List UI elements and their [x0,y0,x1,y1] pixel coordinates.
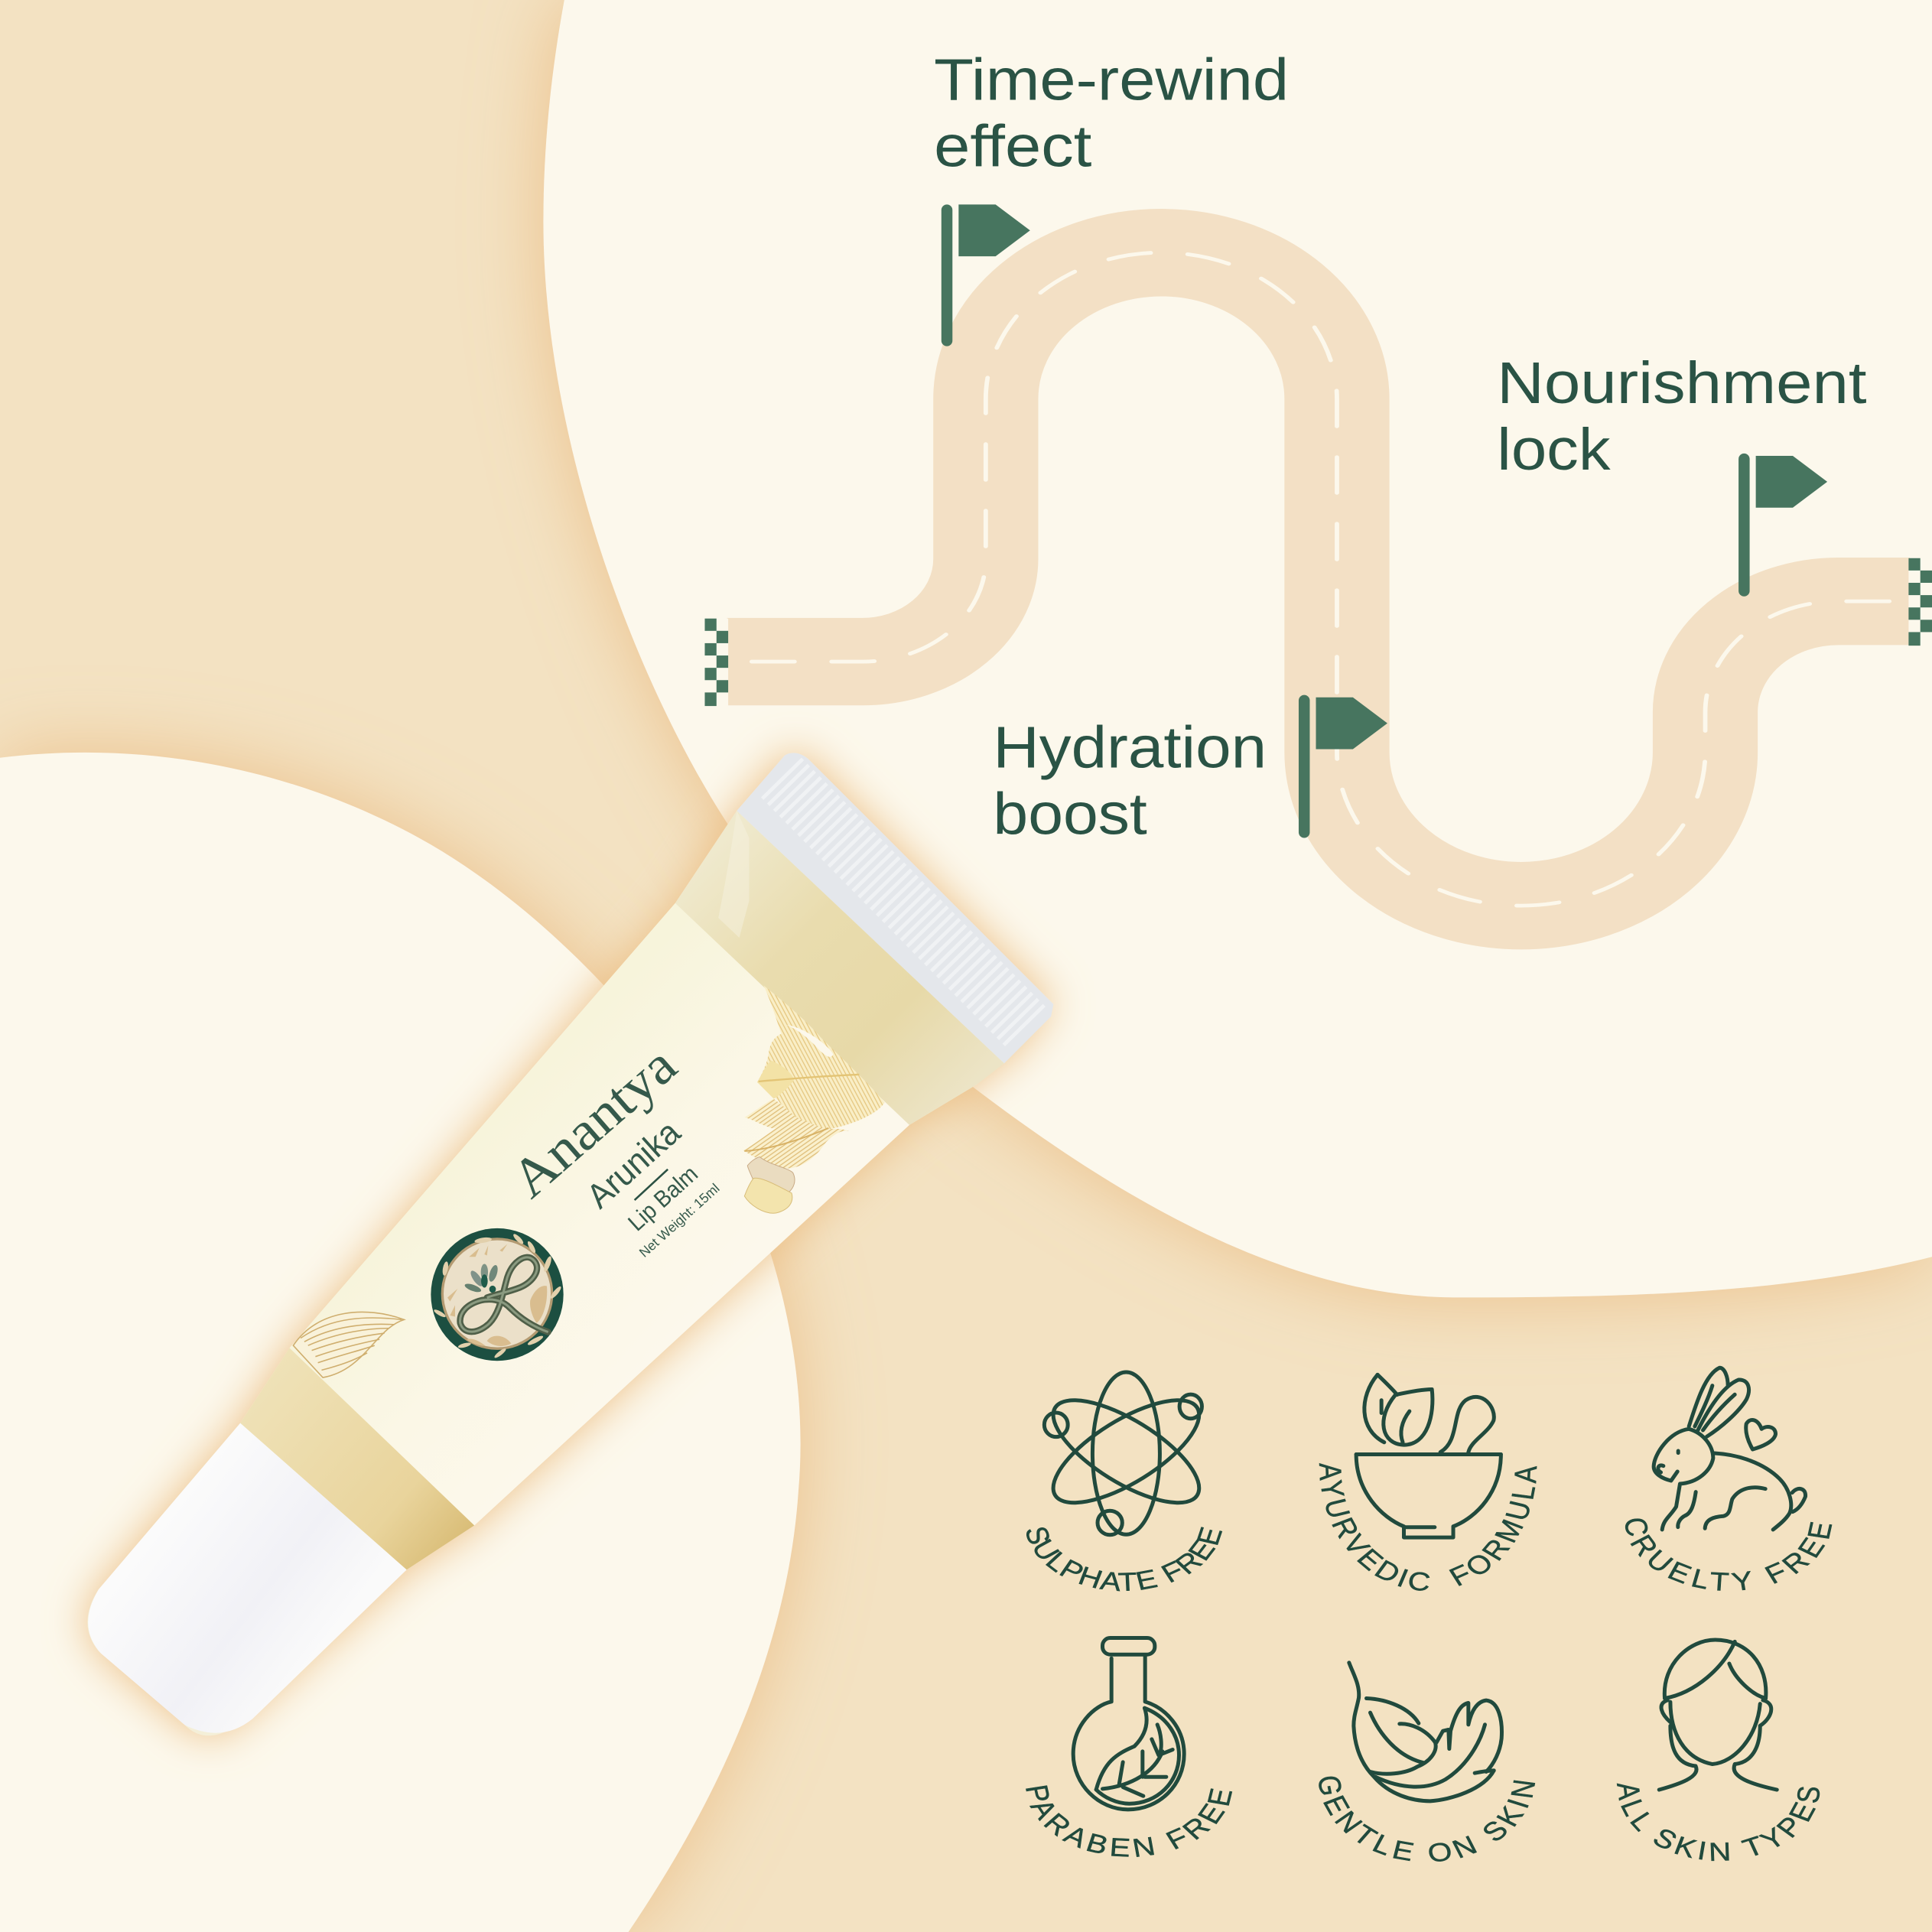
lip balm tube [87,753,1053,1735]
leaf hole [786,1025,833,1057]
label: hydration boost [993,715,1267,847]
atom glyph [1029,1372,1223,1535]
icon: paraben free [1026,1636,1233,1857]
caption path text: PARABEN FREE [1026,1785,1233,1857]
checkered start line [704,619,728,706]
serpent highlight [460,1257,548,1332]
tube text: weight: Net Weight: 15ml [636,1180,723,1260]
label: hydration boost: boost [993,782,1147,847]
icon: sulphate free [1026,1371,1222,1591]
icon: gentle on skin [1319,1660,1536,1862]
main leaf [757,985,885,1130]
caption path text: ALL SKIN TYPES [1617,1784,1820,1862]
leaf bright lobe [757,1061,794,1099]
round logo seal [431,1228,564,1361]
crimp ridges [781,778,1028,1029]
caption path text: SULPHATE FREE [1026,1527,1222,1591]
lotus [463,1264,499,1294]
gold leaf top right [743,985,885,1213]
lower leaf [743,1117,849,1169]
label: nourishment lock [1497,350,1867,483]
caption path text: AYURVEDIC FORMULA [1319,1462,1537,1591]
printed label [290,903,909,1525]
panel: lower-left light blob [0,753,801,1932]
rabbit glyph [1654,1368,1806,1530]
flask glyph [1073,1638,1184,1810]
label: hydration boost: Hydration [993,715,1267,781]
road centre dashes [727,252,1910,906]
lower bud petal [744,1178,792,1213]
label: nourishment lock: lock [1497,417,1611,483]
tube text: brand: Anantya [500,1035,688,1209]
flag: time-rewind [942,204,1030,346]
icon: cruelty free [1625,1366,1833,1591]
crimp seal [737,753,1053,1063]
label: time-rewind effect: Time-rewind [934,47,1289,112]
caption path text: CRUELTY FREE [1625,1518,1833,1591]
flag: hydration [1299,695,1387,838]
tube text: product: Arunika [579,1112,688,1215]
panel: top-right light blob [543,0,1932,1297]
checkered finish line [1908,558,1932,646]
upper bud petal [747,1157,795,1193]
gold leaf lower left [293,1312,404,1377]
lower leaf midrib [744,1128,828,1151]
label: nourishment lock: Nourishment [1497,350,1867,416]
leaf and feather glyph [1349,1663,1501,1801]
gel highlight [718,811,749,938]
face glyph [1659,1640,1777,1790]
seal rim [431,1228,564,1361]
label: time-rewind effect [934,47,1289,179]
icon: ayurvedic formula [1319,1372,1537,1591]
white cap [88,1423,407,1733]
tube divider [635,1169,668,1200]
seal disc [442,1239,552,1348]
seal rim leaves [433,1233,562,1359]
upper clear gel section [675,811,1004,1125]
tube silhouette with glow [87,753,1053,1735]
mortar glyph [1356,1374,1501,1537]
side leaf [744,1099,795,1128]
flag: nourishment [1738,454,1827,597]
caption path text: GENTLE ON SKIN [1319,1776,1536,1862]
seal inner leaves [447,1244,547,1346]
road surface [727,252,1910,906]
tube text: type: Lip Balm [623,1161,703,1236]
infinity serpent [460,1257,548,1332]
road [704,252,1932,906]
label: time-rewind effect: effect [934,113,1091,179]
lower clear gel section [240,1348,474,1569]
leaf midrib [759,1075,859,1081]
icon: all skin types [1617,1638,1820,1862]
